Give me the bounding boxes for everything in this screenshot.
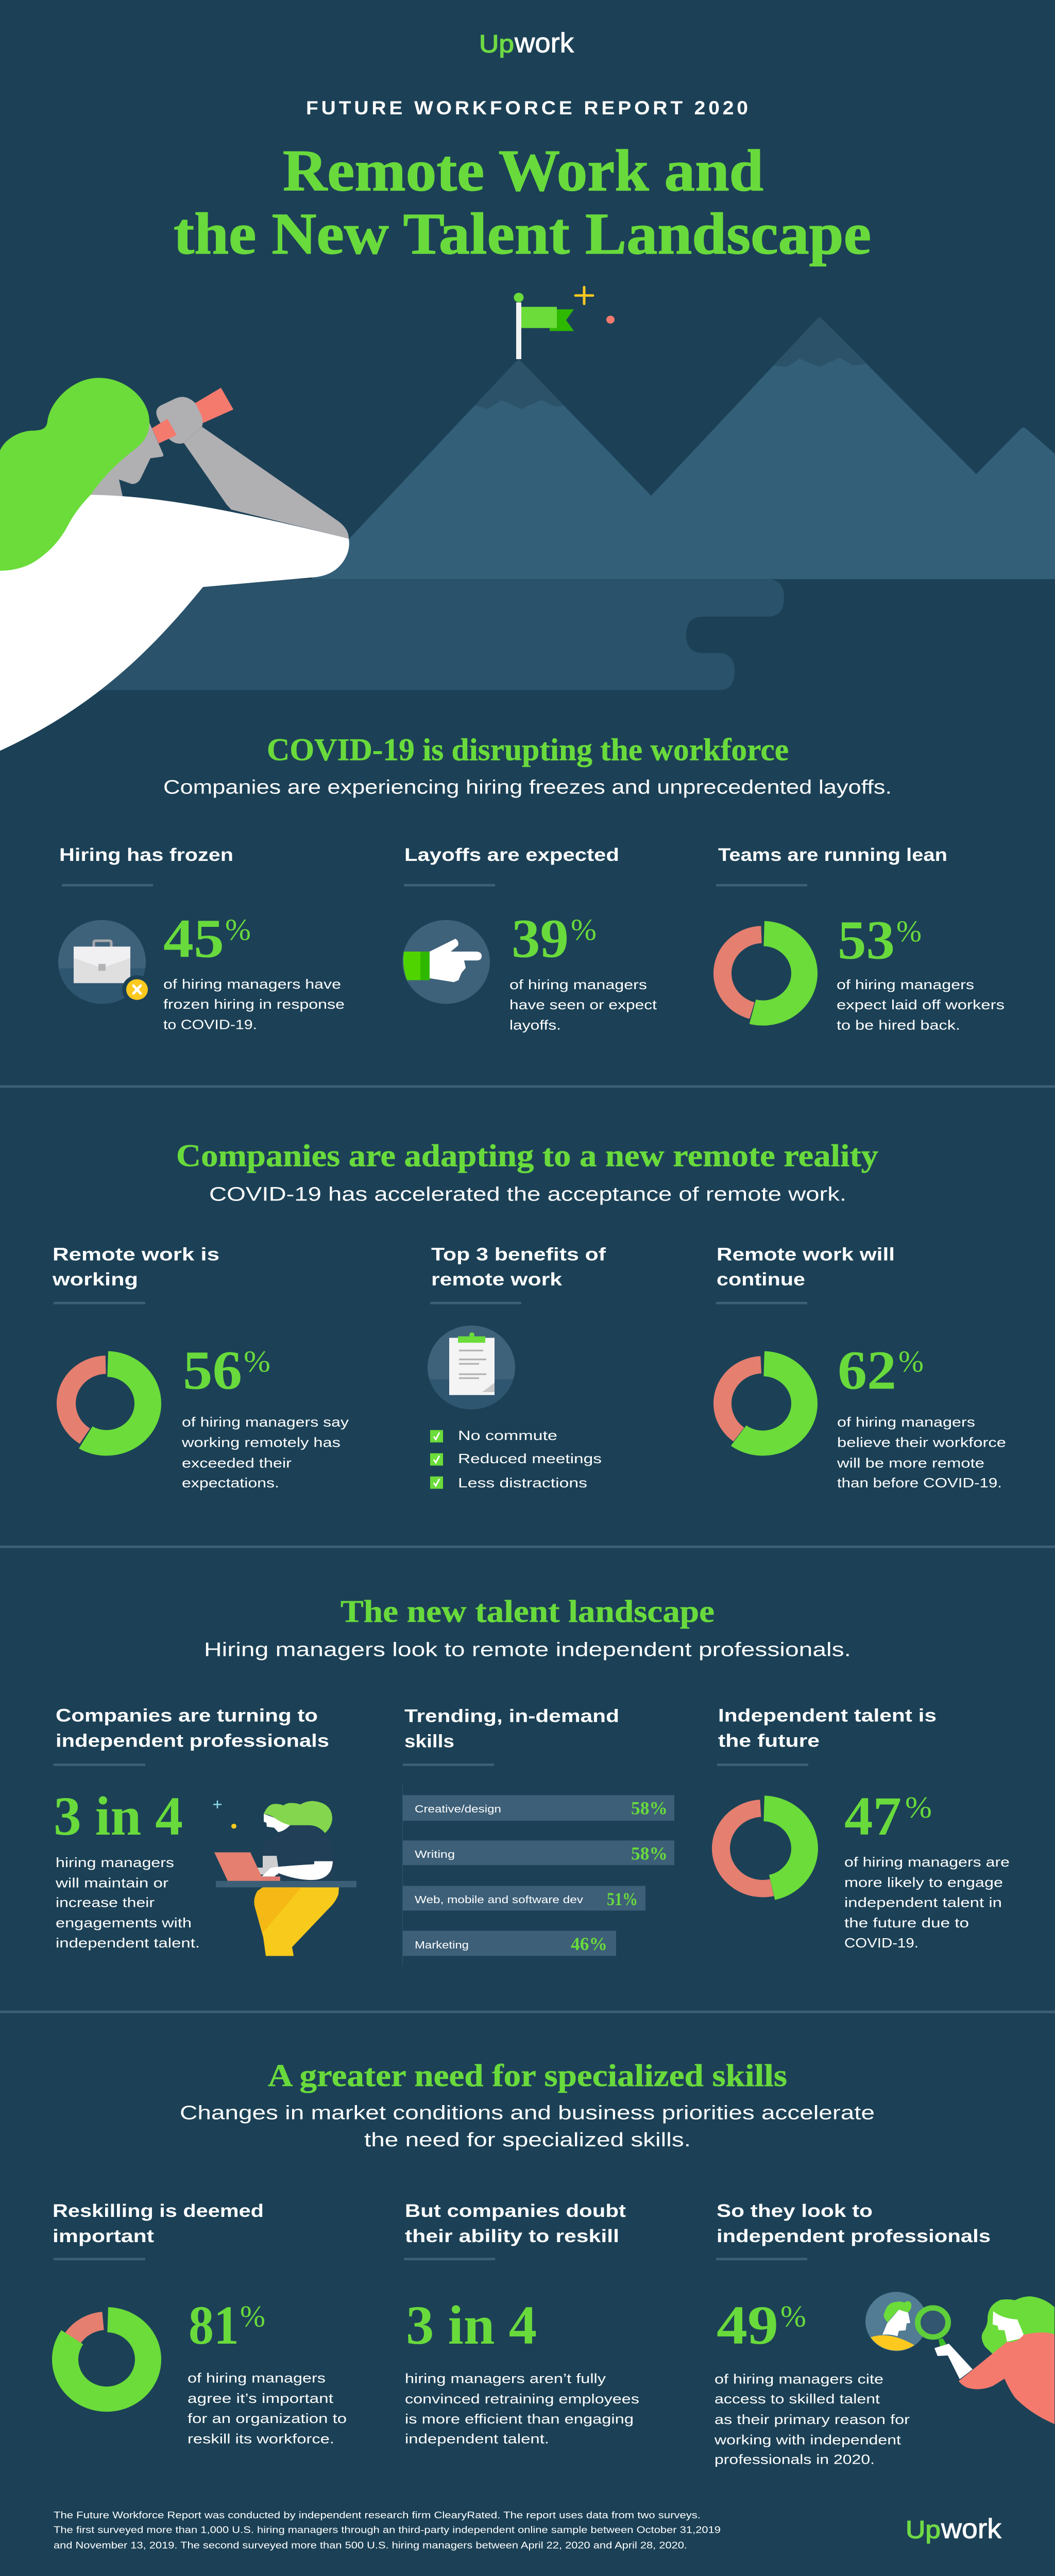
body text: convinced retraining employees xyxy=(405,2391,639,2406)
column heading xyxy=(717,2200,991,2246)
stat: 47%: 47 xyxy=(844,1785,901,1846)
logo: upwork bottom: work xyxy=(941,2513,1002,2544)
bar: web, mobile and software dev: Web, mobile and software dev xyxy=(415,1894,584,1906)
column heading: important xyxy=(53,2226,154,2246)
body text: of hiring managers xyxy=(188,2370,326,2386)
donut chart: 62% xyxy=(706,1349,820,1458)
panel: Companies are adapting to a new remote reality xyxy=(50,1138,1006,1490)
column heading: skills xyxy=(404,1731,454,1751)
stat: 49%: 49 xyxy=(717,2294,778,2355)
checklist xyxy=(430,1428,602,1490)
section subheading: COVID-19 has accelerated the acceptance of remote work. xyxy=(209,1183,846,1205)
section subheading: Companies are experiencing hiring freezes and unprecedented layoffs. xyxy=(163,776,892,798)
body text: as their primary reason for xyxy=(714,2412,910,2427)
panel: A greater need for specialized skills xyxy=(51,2058,1054,2467)
body text: than before COVID-19. xyxy=(837,1475,1002,1490)
body text: working remotely has xyxy=(181,1435,341,1450)
bar: creative/design: 58% xyxy=(631,1798,668,1818)
stat: 39% xyxy=(512,908,597,969)
stat: 49% xyxy=(717,2294,806,2355)
icon: coral dot xyxy=(606,316,615,324)
bar: creative/design xyxy=(403,1795,674,1821)
stat: 62% xyxy=(838,1339,924,1401)
body text: independent talent in xyxy=(844,1895,1002,1910)
body text: of hiring managers say xyxy=(182,1415,349,1430)
column heading: Remote work is xyxy=(53,1244,219,1264)
stat: 3 in 4: 3 in 4 xyxy=(54,1785,183,1846)
donut chart: 47% xyxy=(713,1801,813,1896)
body text: of hiring managers xyxy=(837,977,974,992)
body text: have seen or expect xyxy=(509,997,657,1012)
icon: clipboard xyxy=(428,1326,515,1410)
icon: briefcase xyxy=(58,920,152,1004)
column heading: Trending, in-demand xyxy=(404,1705,619,1726)
donut chart: 56% xyxy=(50,1350,163,1457)
illustration: woman with magnifying glass xyxy=(918,2296,1054,2424)
body text xyxy=(844,1855,1010,1951)
column heading: working xyxy=(52,1269,138,1290)
body text: frozen hiring in response xyxy=(163,997,345,1012)
body text: of hiring managers xyxy=(509,977,647,992)
column heading: their ability to reskill xyxy=(405,2226,619,2246)
logo: upwork top: work xyxy=(514,27,574,58)
column heading xyxy=(405,2200,626,2246)
column heading: So they look to xyxy=(717,2200,873,2221)
item: reduced meetings xyxy=(430,1451,602,1466)
panel: The new talent landscape xyxy=(54,1594,1010,1967)
section subheading xyxy=(180,2102,875,2151)
footnote: The first surveyed more than 1,000 U.S. hiring managers through an third-party independent online sample between October 31,2019 xyxy=(54,2524,721,2535)
stat: 62%: 62 xyxy=(838,1339,896,1401)
logo: upwork bottom: Up xyxy=(906,2516,941,2544)
column heading xyxy=(717,1244,895,1290)
body text: expect laid off workers xyxy=(837,997,1005,1012)
column heading: continue xyxy=(717,1269,805,1290)
column: independent professionals xyxy=(54,1705,356,1956)
body text: exceeded their xyxy=(182,1455,292,1470)
panel: hero header xyxy=(0,27,1055,751)
body text: hiring managers aren’t fully xyxy=(405,2371,606,2386)
body text: of hiring managers cite xyxy=(714,2371,883,2386)
body text: reskill its workforce. xyxy=(188,2431,334,2446)
report label: FUTURE WORKFORCE REPORT 2020 xyxy=(306,97,748,119)
column: hiring has frozen xyxy=(58,844,345,1032)
footnote: The Future Workforce Report was conducted by independent research firm ClearyRated. The report uses data from two surveys. xyxy=(54,2510,701,2520)
bar: writing: 58% xyxy=(631,1843,668,1864)
footnote xyxy=(54,2510,721,2550)
section subheading: Hiring managers look to remote independent professionals. xyxy=(204,1639,851,1660)
body text: to be hired back. xyxy=(837,1018,960,1032)
item: no commute xyxy=(430,1428,557,1443)
column heading: Reskilling is deemed xyxy=(53,2200,264,2221)
panel: COVID-19 is disrupting the workforce xyxy=(58,732,1005,1032)
stat: 3 in 4: 3 in 4 xyxy=(406,2294,537,2355)
donut chart: 53% xyxy=(713,925,813,1021)
stat: 81%: 81 xyxy=(189,2294,239,2355)
column heading: Companies are turning to xyxy=(56,1705,318,1725)
section subheading: the need for specialized skills. xyxy=(364,2129,691,2151)
body text: working with independent xyxy=(714,2432,901,2447)
bar: creative/design: Creative/design xyxy=(415,1803,501,1815)
stat: 47% xyxy=(844,1785,932,1846)
body text: will maintain or xyxy=(55,1875,168,1890)
stat: 45%: % xyxy=(225,913,251,947)
bar: marketing: 46% xyxy=(571,1934,607,1954)
column heading xyxy=(52,1244,219,1290)
body text xyxy=(837,977,1005,1032)
illustration: woman with telescope xyxy=(0,378,349,751)
column heading: Independent talent is xyxy=(718,1705,937,1725)
body text: is more efficient than engaging xyxy=(405,2412,634,2427)
column heading xyxy=(56,1705,329,1751)
stat: 39%: % xyxy=(571,913,597,947)
column heading: remote work xyxy=(431,1269,563,1290)
body text: believe their workforce xyxy=(837,1435,1006,1450)
body text: increase their xyxy=(56,1895,155,1910)
body text xyxy=(163,976,345,1032)
icon: yellow plus xyxy=(575,287,593,304)
section heading: Companies are adapting to a new remote reality xyxy=(176,1138,878,1173)
body text: of hiring managers have xyxy=(163,976,341,992)
item: reduced meetings: Reduced meetings xyxy=(458,1451,602,1466)
stat: 56% xyxy=(183,1339,270,1401)
bar: writing xyxy=(403,1840,674,1865)
body text xyxy=(509,977,657,1032)
column heading: But companies doubt xyxy=(405,2200,626,2221)
body text: access to skilled talent xyxy=(714,2391,880,2406)
stat: 56%: 56 xyxy=(183,1339,242,1401)
body text xyxy=(181,1415,349,1490)
stat: 53% xyxy=(838,909,922,971)
body text: independent talent. xyxy=(56,1936,200,1951)
illustration: foreground ground shape xyxy=(77,579,784,690)
stat: 62%: % xyxy=(898,1345,924,1379)
section heading: A greater need for specialized skills xyxy=(268,2058,787,2093)
stat: 45%: 45 xyxy=(163,908,224,969)
body text xyxy=(837,1415,1006,1490)
body text: agree it’s important xyxy=(188,2391,334,2406)
body text: for an organization to xyxy=(188,2411,347,2426)
stat: 56%: % xyxy=(244,1345,270,1379)
body text: to COVID-19. xyxy=(163,1017,257,1032)
column: layoffs are expected xyxy=(402,844,657,1032)
column heading xyxy=(718,1705,937,1751)
body text: will be more remote xyxy=(837,1455,984,1470)
column: look to independent professionals xyxy=(714,2200,1054,2467)
column: companies doubt ability to reskill xyxy=(404,2200,639,2446)
body text: more likely to engage xyxy=(844,1875,1003,1890)
body text xyxy=(55,1855,200,1951)
column heading: Remote work will xyxy=(717,1244,895,1264)
section heading: COVID-19 is disrupting the workforce xyxy=(267,732,789,767)
column heading: the future xyxy=(718,1730,820,1751)
body text: hiring managers xyxy=(56,1855,174,1870)
illustration: candidate in circle xyxy=(865,2292,927,2351)
logo: upwork top: Up xyxy=(479,30,514,58)
column: remote work will continue xyxy=(706,1244,1006,1490)
column heading xyxy=(53,2200,264,2246)
bar: marketing xyxy=(403,1931,616,1956)
icon: flag on summit xyxy=(514,293,574,359)
item: no commute: No commute xyxy=(458,1428,557,1443)
logo: upwork bottom xyxy=(906,2513,1002,2544)
stat: 45% xyxy=(163,908,251,969)
item: less distractions: Less distractions xyxy=(458,1475,587,1490)
body text xyxy=(188,2370,347,2446)
illustration: woman at laptop xyxy=(213,1801,356,1956)
body text: COVID-19. xyxy=(844,1936,918,1951)
body text: expectations. xyxy=(182,1475,279,1490)
body text: layoffs. xyxy=(509,1018,561,1032)
bar: web, mobile and software dev xyxy=(403,1886,645,1910)
stat: 53%: 53 xyxy=(838,909,895,971)
bar: web, mobile and software dev: 51% xyxy=(607,1889,638,1909)
item: less distractions xyxy=(430,1475,587,1490)
title: Remote Work and xyxy=(283,138,763,204)
section subheading: Changes in market conditions and business priorities accelerate xyxy=(180,2102,875,2124)
logo: upwork top xyxy=(479,27,574,58)
stat: 49%: % xyxy=(780,2300,806,2333)
column heading xyxy=(431,1244,606,1290)
body text xyxy=(405,2371,639,2446)
column heading xyxy=(404,1705,619,1751)
column: remote work is working xyxy=(50,1244,349,1490)
column: teams are running lean xyxy=(713,844,1005,1032)
stat: 53%: % xyxy=(896,914,922,948)
column: trending skills xyxy=(402,1705,674,1967)
stat: 47%: % xyxy=(905,1791,932,1824)
body text: engagements with xyxy=(56,1915,192,1930)
section heading: The new talent landscape xyxy=(341,1594,714,1629)
bar: marketing: Marketing xyxy=(415,1939,469,1951)
stat: 81%: % xyxy=(240,2300,265,2333)
column heading: Teams are running lean xyxy=(718,844,947,865)
donut chart: 81% xyxy=(51,2307,162,2413)
title: the New Talent Landscape xyxy=(174,201,871,267)
column: top 3 benefits xyxy=(428,1244,606,1490)
footnote: and November 13, 2019. The second surveyed more than 500 U.S. hiring managers between April 22, 2020 and April 28, 2020. xyxy=(54,2540,687,2550)
body text: independent talent. xyxy=(405,2431,549,2446)
column heading: independent professionals xyxy=(56,1730,329,1751)
column heading: Hiring has frozen xyxy=(59,844,233,865)
body text: professionals in 2020. xyxy=(714,2452,875,2467)
title xyxy=(174,138,871,267)
column: reskilling is deemed important xyxy=(51,2200,347,2446)
body text xyxy=(714,2371,910,2467)
illustration: mountains xyxy=(311,317,1055,579)
bar chart: skills xyxy=(402,1784,674,1967)
column: independent talent is the future xyxy=(713,1705,1010,1951)
column heading: Layoffs are expected xyxy=(404,844,619,865)
column heading: Top 3 benefits of xyxy=(431,1244,606,1264)
stat: 39%: 39 xyxy=(512,908,569,969)
body text: of hiring managers xyxy=(837,1415,975,1430)
column heading: independent professionals xyxy=(717,2226,991,2246)
body text: the future due to xyxy=(844,1915,969,1930)
body text: of hiring managers are xyxy=(844,1855,1010,1870)
icon: pointing hand xyxy=(402,920,490,1004)
bar: writing: Writing xyxy=(415,1849,455,1860)
